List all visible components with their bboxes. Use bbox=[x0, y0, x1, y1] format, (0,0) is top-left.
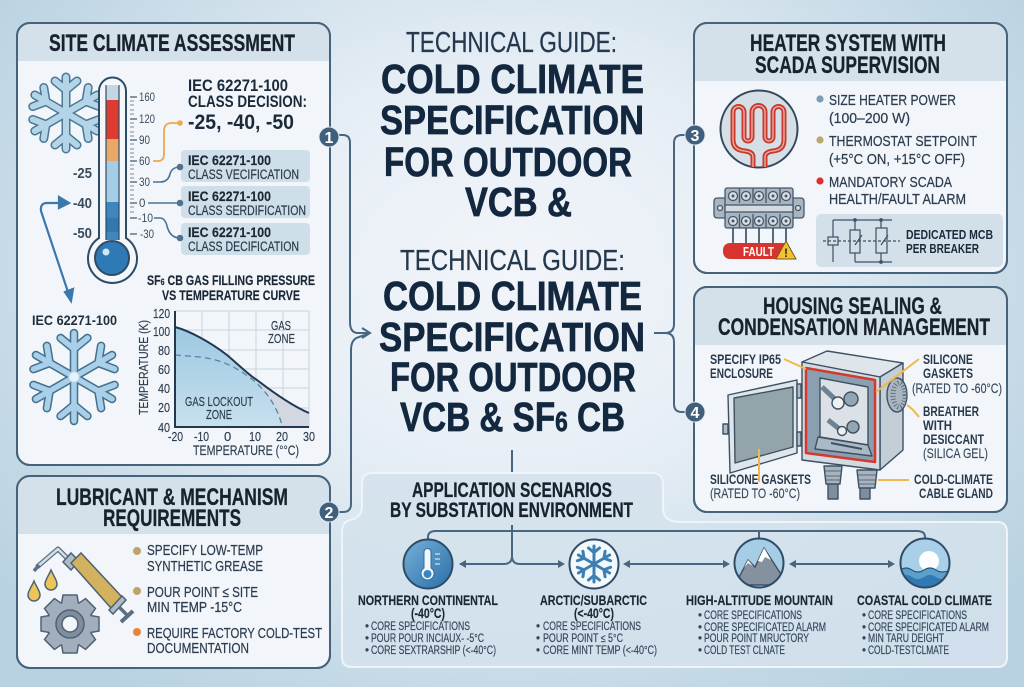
scenario: coastal cold climate: COLD-TESTCLMATE bbox=[868, 645, 949, 657]
class verification box: CLASS VECIFICATION bbox=[188, 167, 299, 182]
dedicated MCB box: DEDICATED MCB bbox=[906, 227, 993, 242]
badge 1 bbox=[319, 127, 339, 147]
class verification box: IEC 62271-100 bbox=[188, 153, 271, 168]
bullet list: lubricant: REQUIRE FACTORY COLD-TEST bbox=[147, 626, 322, 642]
title: second block: TECHNICAL GUIDE: bbox=[400, 245, 625, 277]
panel: housing sealing and condensation management bbox=[694, 287, 1007, 512]
icon: thermometer badge bbox=[404, 540, 452, 588]
lower standard label: IEC 62271-100 bbox=[32, 312, 117, 328]
bullet list: heater: MANDATORY SCADA bbox=[829, 174, 952, 191]
scenario: northern continental: CORE SPECIFICATIONS bbox=[371, 621, 470, 633]
line chart: pressure vs temperature: 20 bbox=[158, 400, 170, 415]
line chart: pressure vs temperature: 40 bbox=[158, 420, 170, 435]
title: second block: COLD CLIMATE bbox=[383, 273, 642, 319]
callout: IP65 enclosure: ENCLOSURE bbox=[710, 365, 773, 381]
bullet list: heater bbox=[816, 92, 977, 208]
thermometer scale: -10 bbox=[138, 213, 153, 225]
icon: thermometer bbox=[88, 78, 137, 283]
heading: lubricant: LUBRICANT & MECHANISM bbox=[56, 484, 288, 511]
line chart: pressure vs temperature: TEMPERATURE (K) bbox=[136, 320, 151, 415]
line chart: pressure vs temperature: 20 bbox=[276, 429, 288, 444]
arrow: class -40 to lower snowflake bbox=[41, 197, 73, 301]
temperature class labels bbox=[73, 165, 92, 242]
thermometer scale: 30 bbox=[139, 177, 150, 189]
chart title: SF6 CB GAS FILLING PRESSURE bbox=[147, 273, 315, 288]
badge 2 bbox=[319, 502, 339, 522]
scenario: northern continental: NORTHERN CONTINENTAL bbox=[358, 593, 498, 608]
scenario: northern continental: (-40°C) bbox=[411, 606, 445, 621]
line chart: pressure vs temperature: 100 bbox=[153, 324, 170, 339]
callout: breather bbox=[923, 403, 988, 461]
icon: snowflake lower bbox=[29, 333, 119, 421]
title: first block: TECHNICAL GUIDE: bbox=[406, 27, 617, 59]
heading: site climate assessment: SITE CLIMATE ASSESSMENT bbox=[49, 30, 295, 57]
line chart: pressure vs temperature: 0 bbox=[224, 429, 231, 444]
icon: oil drops bbox=[28, 570, 57, 601]
line chart: pressure vs temperature: -20 bbox=[168, 429, 183, 444]
title: second block: SPECIFICATION bbox=[379, 314, 645, 360]
line chart: pressure vs temperature: 40 bbox=[158, 381, 170, 396]
line chart: pressure vs temperature: TEMPERATURE (°°C) bbox=[193, 442, 299, 458]
line chart: pressure vs temperature: 30 bbox=[303, 429, 315, 444]
class decision text: IEC 62271-100 bbox=[188, 76, 288, 95]
scenario: high-altitude mountain: • bbox=[698, 633, 702, 645]
title: second block: FOR OUTDOOR bbox=[390, 354, 636, 400]
icon: gear bbox=[41, 595, 99, 653]
icon: sea and sun badge bbox=[900, 538, 950, 590]
bullet list: lubricant: POUR POINT ≤ SITE bbox=[147, 585, 258, 601]
line chart: pressure vs temperature: GAS LOCKOUT bbox=[185, 394, 253, 409]
fault tag: FAULT bbox=[743, 245, 774, 259]
title: second block bbox=[379, 245, 645, 440]
connector: badges 1 and 2 to title bbox=[338, 135, 370, 512]
scenario: high-altitude mountain: • bbox=[698, 610, 702, 622]
title: first block: SPECIFICATION bbox=[380, 97, 644, 143]
heading: application scenarios: APPLICATION SCENARIOS bbox=[412, 479, 612, 502]
callout: breather: (SILICA GEL) bbox=[923, 445, 988, 461]
scenario: arctic subarctic bbox=[536, 593, 657, 657]
scenario: arctic subarctic: ARCTIC/SUBARCTIC bbox=[540, 593, 647, 608]
line chart: pressure vs temperature: 60 bbox=[158, 362, 170, 377]
temperature class labels: -50 bbox=[73, 225, 92, 242]
line chart: pressure vs temperature: -10 bbox=[194, 429, 209, 444]
panel: lubricant and mechanism requirements bbox=[17, 476, 330, 668]
heading: housing: HOUSING SEALING & bbox=[763, 293, 942, 320]
scenario: coastal cold climate: • bbox=[862, 610, 866, 622]
scenario: high-altitude mountain bbox=[686, 593, 833, 657]
heading: lubricant bbox=[56, 484, 288, 532]
scenario: coastal cold climate: COASTAL COLD CLIMATE bbox=[857, 593, 992, 608]
class decision text: -25, -40, -50 bbox=[188, 111, 294, 134]
callout: silicone gaskets right: SILICONE bbox=[923, 351, 973, 367]
connector: title to application scenarios bbox=[511, 450, 513, 472]
icon: snowflake top bbox=[29, 77, 103, 149]
badge 4 bbox=[685, 402, 705, 422]
scenario: northern continental bbox=[358, 593, 498, 657]
line chart: pressure vs temperature: 10 bbox=[249, 429, 261, 444]
callout: IP65 enclosure: SPECIFY IP65 bbox=[710, 351, 781, 367]
heading: heater: HEATER SYSTEM WITH bbox=[750, 30, 946, 57]
thermometer scale bbox=[130, 92, 155, 241]
bullet list: lubricant bbox=[133, 543, 322, 657]
title: second block: VCB & SF6 CB bbox=[400, 394, 625, 440]
callout: cable gland: CABLE GLAND bbox=[919, 485, 993, 501]
scenario: high-altitude mountain: HIGH-ALTITUDE MOUNTAIN bbox=[686, 593, 833, 608]
icon: terminal block bbox=[714, 188, 804, 244]
scenario: coastal cold climate: • bbox=[862, 622, 866, 634]
scenario: coastal cold climate: • bbox=[862, 633, 866, 645]
callout: silicone gaskets right: GASKETS bbox=[923, 365, 973, 381]
class serdification box: IEC 62271-100 bbox=[188, 189, 271, 204]
bullet list: lubricant: MIN TEMP -15°C bbox=[147, 600, 242, 616]
bullet list: lubricant: SPECIFY LOW-TEMP bbox=[147, 543, 263, 559]
title: first block: VCB & bbox=[465, 179, 572, 225]
heading: application scenarios bbox=[390, 479, 633, 522]
heading: heater bbox=[750, 30, 946, 79]
temperature class labels: -25 bbox=[73, 165, 92, 182]
bullet list: heater: (100–200 W) bbox=[829, 110, 910, 127]
callout: IP65 enclosure bbox=[710, 351, 781, 381]
callout: silicone gaskets right bbox=[912, 351, 1002, 396]
connector: orange to class decision bbox=[153, 120, 183, 161]
title: first block: FOR OUTDOOR bbox=[384, 139, 632, 185]
class verification box bbox=[181, 150, 310, 182]
schematic: relay circuit bbox=[823, 219, 900, 263]
icon: heating element bbox=[720, 90, 798, 168]
bullet list: heater: (+5°C ON, +15°C OFF) bbox=[829, 151, 965, 168]
class decification box: CLASS DECIFICATION bbox=[188, 239, 299, 254]
heading: application scenarios: BY SUBSTATION ENVIRONMENT bbox=[390, 499, 633, 522]
callout: silicone gaskets lower: SILICONE GASKETS bbox=[710, 471, 811, 487]
badge 2: 2 bbox=[325, 505, 334, 522]
badge 3: 3 bbox=[691, 128, 700, 145]
panel: heater system with SCADA supervision bbox=[694, 23, 1007, 273]
scenario: high-altitude mountain: CORE SPECIFICATIONS bbox=[704, 610, 802, 622]
bullet list: heater: HEALTH/FAULT ALARM bbox=[829, 191, 966, 208]
heading: housing bbox=[718, 293, 990, 341]
scenario: high-altitude mountain: COLD TEST CLNATE bbox=[704, 645, 785, 657]
thermometer scale: 160 bbox=[139, 92, 155, 104]
badge 1: 1 bbox=[325, 130, 334, 147]
thermometer scale: 60 bbox=[139, 156, 150, 168]
title: first block: COLD CLIMATE bbox=[381, 56, 644, 102]
scenario: high-altitude mountain: CORE SPECIFICATED ALARM bbox=[704, 622, 826, 634]
bullet list: heater: THERMOSTAT SETPOINT bbox=[829, 133, 977, 150]
scenario: arctic subarctic: • bbox=[536, 633, 540, 645]
panel: site climate assessment bbox=[17, 23, 330, 465]
callout: breather: DESICCANT bbox=[923, 431, 984, 447]
thermometer scale: 0 bbox=[139, 198, 145, 210]
scenario: high-altitude mountain: • bbox=[698, 622, 702, 634]
callout: cable gland: COLD-CLIMATE bbox=[914, 471, 993, 487]
callout: breather: WITH bbox=[923, 417, 952, 433]
bullet list: lubricant: SYNTHETIC GREASE bbox=[147, 559, 263, 575]
leader lines: enclosure callouts bbox=[759, 359, 919, 482]
dedicated MCB box: PER BREAKER bbox=[906, 241, 979, 256]
class serdification box bbox=[181, 186, 310, 218]
bullet list: lubricant: DOCUMENTATION bbox=[147, 641, 249, 657]
scenario: high-altitude mountain: POUR POINT MRUCTORY bbox=[704, 633, 809, 645]
scenario: arctic subarctic: CORE SPECIFICATIONS bbox=[543, 621, 641, 633]
connectors: scale to class boxes bbox=[148, 164, 182, 240]
scenario: northern continental: CORE SEXTRARSHIP (<-40°C) bbox=[371, 645, 496, 657]
connector: title to badges 3 and 4 bbox=[654, 135, 690, 412]
class decification box bbox=[181, 223, 310, 255]
line chart: pressure vs temperature: 80 bbox=[158, 343, 170, 358]
fault tag: ! bbox=[784, 246, 788, 260]
badge 3 bbox=[685, 125, 705, 145]
callout: cable gland bbox=[914, 471, 993, 501]
scenario: arctic subarctic: POUR POINT ≤ 5°C bbox=[543, 633, 623, 645]
icon: grease gun bbox=[34, 549, 133, 622]
badge 4: 4 bbox=[691, 405, 700, 422]
class decification box: IEC 62271-100 bbox=[188, 225, 271, 240]
scenario: coastal cold climate: MIN TARU DEIGHT bbox=[868, 633, 944, 645]
temperature class labels: -40 bbox=[73, 195, 92, 212]
scenario: coastal cold climate bbox=[857, 593, 992, 657]
line chart: pressure vs temperature: ZONE bbox=[206, 407, 232, 422]
callout: silicone gaskets lower bbox=[710, 471, 811, 501]
line chart: pressure vs temperature: 120 bbox=[153, 306, 170, 321]
scenario: northern continental: • bbox=[365, 621, 369, 633]
thermometer scale: 90 bbox=[139, 135, 150, 147]
scenario: northern continental: • bbox=[365, 645, 369, 657]
icon: mountain badge bbox=[734, 538, 788, 588]
thermometer scale: 120 bbox=[139, 114, 155, 126]
chart title bbox=[147, 273, 315, 303]
class decision text: CLASS DECISION: bbox=[188, 92, 307, 111]
panel: application scenarios bbox=[342, 473, 1007, 667]
callout: silicone gaskets lower: (RATED TO -60°C) bbox=[710, 485, 800, 501]
scenario: coastal cold climate: CORE SPECIFICATIONS bbox=[868, 610, 967, 622]
dedicated MCB box bbox=[816, 214, 1003, 267]
scenario: coastal cold climate: • bbox=[862, 645, 866, 657]
heading: lubricant: REQUIREMENTS bbox=[103, 505, 241, 532]
scenario: arctic subarctic: CORE MINT TEMP (<-40°C) bbox=[543, 645, 657, 657]
line chart: pressure vs temperature bbox=[136, 306, 315, 458]
line chart: pressure vs temperature: GAS bbox=[271, 318, 291, 333]
scenario: northern continental: • bbox=[365, 633, 369, 645]
scenario: high-altitude mountain: • bbox=[698, 645, 702, 657]
scenario: northern continental: POUR POUR INCIAUX- -5°C bbox=[371, 633, 484, 645]
icon: snowflake badge bbox=[570, 540, 618, 588]
scenario: arctic subarctic: (<-40°C) bbox=[574, 606, 614, 621]
class decision text bbox=[188, 76, 307, 134]
chart title: VS TEMPERATURE CURVE bbox=[162, 288, 300, 303]
title: first block bbox=[380, 27, 644, 225]
scenario: arctic subarctic: • bbox=[536, 621, 540, 633]
icon: open enclosure bbox=[723, 351, 907, 499]
line chart: pressure vs temperature: ZONE bbox=[268, 331, 295, 346]
bullet list: heater: SIZE HEATER POWER bbox=[829, 92, 956, 109]
fault tag bbox=[723, 241, 796, 260]
class serdification box: CLASS SERDIFICATION bbox=[188, 203, 306, 218]
connector network bbox=[428, 525, 925, 568]
callout: breather: BREATHER bbox=[923, 403, 979, 419]
thermometer scale: -30 bbox=[140, 229, 154, 241]
scenario: arctic subarctic: • bbox=[536, 645, 540, 657]
heading: heater: SCADA SUPERVISION bbox=[755, 52, 940, 79]
